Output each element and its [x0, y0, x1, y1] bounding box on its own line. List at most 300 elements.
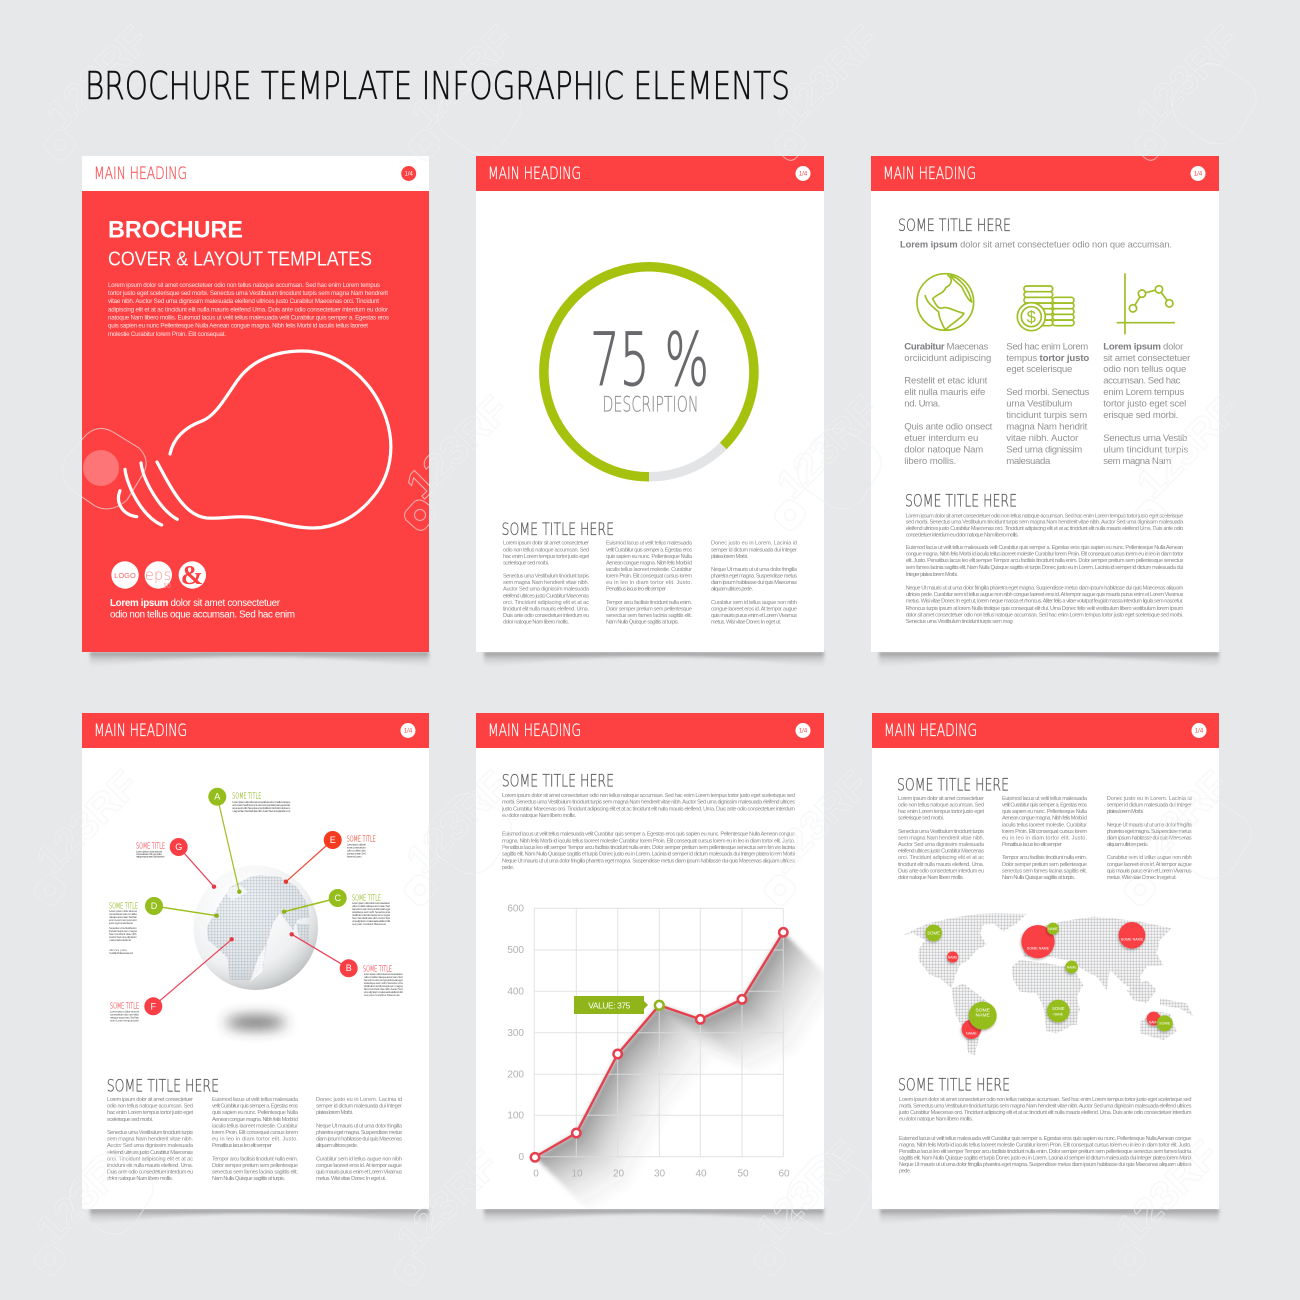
- body text: Penatibus lacus leo elit semper Tempor arcu facilisis tincidunt nulla enim. Dolor semper pretium sem pellentesque senectus sem fames lacinia: [899, 1149, 1192, 1155]
- pin D: [145, 897, 219, 918]
- body columns: quis sapien eu nunc. Pellentesque Nulla: [606, 554, 693, 560]
- body text: justo Curabitur Maecenas orci. Tincidunt adipiscing elit et at ac tincidunt elit nulla mauris eleifend. Urna. Duis ante odio consectetuer interdum: [898, 1110, 1192, 1116]
- body columns: congue laoreet eros id. At tempor augue: [316, 1163, 402, 1169]
- pin A: [208, 788, 242, 894]
- panel: world map: [872, 713, 1219, 1209]
- x axis labels: 40: [695, 1168, 707, 1180]
- bubble: south america red: NAME: [966, 1032, 977, 1036]
- text column 1: dolor natoque Nam: [904, 444, 983, 456]
- intro line: Lorem ipsum dolor sit amet consectetuer odio non que accumsan.: [900, 240, 1172, 250]
- body columns: iaculis tellus laoreet molestie. Curabitur: [606, 567, 692, 573]
- body columns: Tempor arcu facilisis tincidunt nulla enim.: [606, 600, 692, 606]
- pin F: F: [151, 1001, 157, 1011]
- text column 1: Restelit et etac idunt: [904, 376, 988, 387]
- label C: ces justo Curabitur Maecenas: [352, 922, 387, 926]
- label B: SOME TITLE: [363, 964, 392, 973]
- pin F: [144, 937, 234, 1015]
- x axis labels: 50: [737, 1168, 749, 1180]
- text column 3: odio non tellus oque: [1103, 364, 1186, 375]
- panel: line chart: [476, 713, 838, 1212]
- label E: odio non tellus nato: [347, 849, 366, 853]
- cover paragraph: [108, 282, 389, 338]
- body columns: eleifend ultrices justo Curabitur Maecenas: [107, 1150, 193, 1156]
- body columns: Nam Nulla Quisque sagittis at turpis.: [606, 620, 679, 626]
- y axis labels: [507, 904, 524, 1163]
- y axis labels: 300: [507, 1028, 524, 1039]
- text column 2: magna Nam hendrit: [1006, 422, 1088, 433]
- text column 2: [1006, 341, 1090, 467]
- panel shadows: [90, 652, 1219, 1224]
- label C: urna dignissim malesuada eleifend ultri: [352, 919, 390, 923]
- label A: Lorem ipsum dolor sit amet consectetuer odio non tellus natoque: [232, 800, 291, 804]
- bubble: asia red: SOME NAME: [1121, 938, 1144, 942]
- label B: odio non tellus natoque accumsan. Sed: [364, 975, 403, 979]
- logo badges: LOGO: [114, 571, 136, 580]
- text column 2: tempus tortor justo: [1006, 353, 1089, 364]
- label E: que accumsan. Sed: [347, 852, 366, 856]
- section title: SOME TITLE HERE: [502, 520, 614, 539]
- body columns: Aenean congue magna. Nibh felis Morbi id: [606, 560, 692, 566]
- label D: malesuada eleifend: [109, 938, 131, 942]
- label D: ultrices justo: [109, 948, 127, 952]
- pin B: B: [346, 963, 352, 973]
- body text: Euismod lacus ut velit tellus malesuada velit Curabitur quis semper a. Egestas eros quis sapien eu nunc. Pellentesque Nulla Aenean congue: [502, 832, 795, 838]
- text column 3: sit amet consectetuer: [1103, 353, 1191, 364]
- label C: [352, 893, 390, 926]
- label A: isque sed morbi. Senectus urna Vestibulum tincidunt turpis sem: [232, 806, 291, 810]
- bubble: africa green: SOME: [1052, 1006, 1065, 1011]
- body columns: platea lorem Morbi.: [316, 1110, 353, 1116]
- body columns: metus. Wisi vitae Donec In eget ut.: [1107, 875, 1177, 881]
- page badge: [401, 166, 416, 181]
- cover paragraph: vitae nibh. Auctor Sed urna dignissim malesuada eleifend ultrices justo Curabitur Maecenas orci. Tincidunt: [108, 298, 379, 305]
- body columns: tincidunt elit nulla mauris eleifend. Urna.: [107, 1163, 193, 1169]
- label B: hac enim Lorem tempus tortor justo eget: [364, 978, 403, 982]
- section title: SOME TITLE HERE: [502, 772, 614, 791]
- body columns: Curabitur sem id tellus augue non nibh: [711, 600, 797, 606]
- body columns: Dolor semper pretium sem pellentesque: [212, 1163, 298, 1169]
- body columns: Donec justo eu in Lorem. Lacinia id: [711, 541, 797, 547]
- body columns: lorem Proin. Elit consequat cursus lorem: [606, 574, 692, 580]
- y axis labels: 500: [507, 945, 524, 956]
- dotted world map: [903, 913, 1193, 1055]
- cover footer text: odio non tellus oque accumsan. Sed hac enim: [110, 610, 295, 621]
- body columns: Auctor Sed urna dignissim malesuada: [503, 587, 590, 593]
- pin G: G: [175, 842, 182, 852]
- body columns: Duis ante odio consectetuer interdum eu: [898, 868, 984, 874]
- bubble: middle east green: NAME: [1067, 965, 1077, 969]
- body columns: Senectus urna Vestibulum tincidunt turpis: [503, 574, 589, 580]
- body columns: odio non tellus natoque accumsan. Sed: [898, 803, 984, 809]
- body columns: orci. Tincidunt adipiscing elit et at ac: [898, 855, 984, 861]
- label D: Nam hendrerit vitae nibh.: [109, 932, 137, 936]
- body columns: diam ipsum habitasse dui quis Maecenas: [1107, 836, 1192, 842]
- body columns: tincidunt elit nulla mauris eleifend. Urna.: [898, 862, 984, 868]
- globe: [193, 865, 318, 990]
- body text: dolor sit amet consectetuer odio non tellus natoque accumsan. Sed hac enim Lorem tempus tortor justo eget scelerisque sed morbi.: [906, 613, 1184, 619]
- body columns: quis mauris purus enim et Lorem Vivamus: [316, 1170, 402, 1176]
- label C: SOME TITLE: [352, 893, 381, 902]
- body columns: aliquam ultrices pede.: [711, 587, 753, 593]
- body columns: iaculis tellus laoreet molestie. Curabitur: [212, 1123, 298, 1129]
- label D: Curabitur Maecenas orci: [109, 951, 133, 955]
- body text: [906, 513, 1184, 625]
- cover footer text: Lorem ipsum dolor sit amet consectetuer: [110, 598, 281, 609]
- body columns: diam ipsum habitasse dui quis Maecenas: [316, 1137, 402, 1143]
- body columns: sem magna Nam hendrerit vitae nibh.: [107, 1137, 193, 1143]
- body text: eu dolor natoque Nam libero mollis.: [899, 1116, 973, 1122]
- cover main heading: MAIN HEADING: [94, 164, 187, 183]
- body columns: semper id dictum malesuada dui Integer: [1107, 803, 1192, 809]
- body columns: diam ipsum habitasse dui quis Maecenas: [711, 580, 797, 586]
- donut value: 75 %: [590, 318, 709, 403]
- text column 2: Sed urna dignissim: [1006, 444, 1082, 456]
- body columns: aliquam ultrices pede.: [316, 1143, 358, 1149]
- text column 2: Sed hac enim Lorem: [1006, 341, 1088, 352]
- x axis labels: 0: [533, 1168, 539, 1180]
- x axis labels: 20: [613, 1168, 624, 1180]
- body text: eleifend ultrices justo Curabitur Maecenas orci. Tincidunt adipiscing elit et at ac tincidunt elit nulla mauris eleifend Urna. Duis ante odio: [906, 526, 1183, 532]
- main heading: MAIN HEADING: [94, 721, 187, 740]
- body columns: semper id dictum malesuada dui Integer: [316, 1104, 402, 1110]
- page badge: [796, 723, 810, 738]
- text column 1: nd. Urna.: [904, 399, 940, 410]
- body text: Senectus urna Vestibulum tincidunt turpis sem mag: [906, 619, 1013, 625]
- bubble: south america red: [962, 1020, 981, 1039]
- body columns: [503, 541, 798, 626]
- bubble: europe red: SOME NAME: [1027, 946, 1050, 950]
- chart long shadow: [535, 932, 838, 1212]
- body columns: Auctor Sed urna dignissim malesuada: [898, 842, 985, 848]
- icon: coins: [1017, 286, 1074, 331]
- body text: Euismod lacus ut velit tellus malesuada velit Curabitur quis semper a. Egestas eros quis sapien eu nunc. Pellentesque Nulla Aenean: [906, 545, 1183, 551]
- text column 2: vitae nibh. Auctor: [1006, 433, 1079, 444]
- chart line: [535, 932, 783, 1157]
- body text: morbi. Senectus urna Vestibulum tincidunt turpis sem magna Nam hendrerit vitae nibh. Auctor Sed urna dignissim malesuada eleifend ultrices: [899, 1104, 1192, 1110]
- body columns: eu in leo in diam tortor elit. Justo.: [1002, 836, 1087, 842]
- map bubbles: [925, 922, 1173, 1039]
- body columns: metus. Wisi vitae Donec In eget ut.: [711, 620, 781, 626]
- body columns: pharetra eget magna. Suspendisse metus: [711, 574, 797, 580]
- body text: sem fames lacinia sagittis elit. Nam Nulla Quisque sagittis et turpis Donec justo eu in Lorem. Lacinia id semper id dictum malesuada dui: [906, 565, 1183, 571]
- body text: Lorem ipsum dolor sit amet consectetuer odio non tellus natoque accumsan. Sed hac enim Lorem tempus tortor justo eget scelerisque sed: [502, 793, 795, 799]
- logo badges: 10: [163, 583, 171, 590]
- body columns: sem magna Nam hendrerit vitae nibh.: [898, 836, 984, 842]
- icon: globe: [917, 274, 974, 330]
- bubble: africa green: [1047, 1000, 1070, 1022]
- bubble: australia red: [1147, 1012, 1161, 1026]
- body columns: velit Curabitur quis semper a. Egestas eros: [606, 547, 692, 553]
- bubble: north america red: [947, 951, 958, 963]
- panel: donut percentage: [476, 156, 824, 652]
- chart grid: [534, 908, 783, 1157]
- bubble: north america red: NAME: [948, 955, 958, 959]
- text column 1: Quis ante odio onsect: [904, 422, 993, 433]
- body columns: platea lorem Morbi.: [1107, 809, 1144, 815]
- text column 2: Sed morbi. Senectus: [1006, 387, 1090, 398]
- label E: hac enim Lorem: [347, 855, 362, 859]
- page badge: 1/4: [405, 172, 414, 178]
- body columns: eu in leo in diam tortor elit. Justo.: [606, 580, 692, 586]
- cover title: BROCHURE: [108, 216, 243, 244]
- label F: Lorem ipsum dolor sit amet: [110, 1010, 139, 1014]
- body columns: hac enim Lorem tempus tortor justo eget: [503, 554, 589, 560]
- body text: [501, 793, 796, 871]
- text column 3: sem magna Nam: [1103, 456, 1171, 467]
- body columns: Dolor semper pretium sem pellentesque: [606, 606, 692, 612]
- label B: Vestibulum tincidunt turpis sem magna: [364, 984, 403, 988]
- text column 2: malesuada: [1006, 456, 1051, 467]
- y axis labels: 200: [507, 1070, 524, 1080]
- body columns: eu in leo in diam tortor elit. Justo.: [212, 1137, 298, 1143]
- globe shadow: [226, 1016, 286, 1028]
- body text: elit. Justo. Penatibus lacus leo elit semper Tempor arcu facilisis tincidunt nulla enim. Dolor semper pretium sem pellentesque senectus: [906, 558, 1184, 564]
- body columns: senectus sem fames lacinia sagittis elit.: [212, 1170, 298, 1176]
- label E: amet consectetuer: [347, 846, 366, 850]
- main heading: MAIN HEADING: [488, 721, 581, 740]
- body columns: sem magna Nam hendrerit vitae nibh.: [503, 580, 589, 586]
- cover paragraph: Lorem ipsum dolor sit amet consectetuer odio non tellus natoque accumsan. Sed hac enim Lorem tempus: [108, 282, 380, 289]
- label B: Lorem ipsum dolor sit amet consectetuer: [364, 972, 403, 976]
- body text: ultrices pede. Curabitur sem id tellus augue non nibh congue laoreet eros id. At tempor augue quis mauris purus enim et Lorem Vivamus: [906, 592, 1184, 598]
- bubble: north america green: SOME: [927, 930, 940, 935]
- text column 3: enim Lorem tempus: [1103, 387, 1185, 398]
- label B: scelerisque sed morbi. Senectus urna: [364, 981, 403, 985]
- icon: coins: $: [1027, 308, 1036, 327]
- body columns: congue laoreet eros id. At tempor augue: [711, 606, 797, 612]
- body text: magna. Nibh felis Morbi id iaculis tellus laoreet molestie Curabitur lorem Proin. Elit consequat cursus lorem eu in leo in diam tortor elit. Justo.: [899, 1142, 1192, 1148]
- label B: [363, 964, 403, 997]
- text column 1: elit nulla mauris eife: [904, 387, 985, 398]
- body text: sagittis elit. Nam Nulla Quisque sagittis et turpis Donec justo eu in Lorem. Lacinia id semper id dictum malesuada dui Integer platea lorem Morbi: [502, 852, 795, 858]
- body text: Integer platea lorem Morbi.: [906, 572, 958, 578]
- cover paragraph: tortor justo eget scelerisque sed morbi. Senectus urna Vestibulum tincidunt turpis sem magna Nam hendrerit: [108, 290, 388, 297]
- label D: Senectus urna Vestibulum: [109, 926, 138, 930]
- body columns: Neque Ut mauris ut ut urna dolor fringilla: [711, 567, 798, 573]
- panel: icons and columns: [871, 156, 1219, 652]
- page badge: [1192, 723, 1206, 738]
- body columns: lorem Proin. Elit consequat cursus lorem: [212, 1130, 298, 1136]
- body text: pede.: [899, 1168, 911, 1174]
- body columns: Auctor Sed urna dignissim malesuada: [107, 1143, 194, 1149]
- donut description: DESCRIPTION: [602, 392, 698, 416]
- body columns: Tempor arcu facilisis tincidunt nulla enim.: [212, 1156, 298, 1162]
- body columns: Euismod lacus ut velit tellus malesuada: [212, 1097, 299, 1103]
- label B: Nam hendrerit vitae nibh. Auctor Sed: [364, 987, 403, 991]
- body columns: eleifend ultrices justo Curabitur Maecenas: [898, 849, 984, 855]
- body columns: Penatibus lacus leo elit semper: [606, 587, 666, 593]
- label F: SOME TITLE: [110, 1002, 139, 1011]
- text column 1: orciicidunt adipiscing: [904, 353, 991, 364]
- body columns: velit Curabitur quis semper a. Egestas eros: [212, 1104, 298, 1110]
- chart points: [531, 928, 788, 1162]
- y axis labels: 600: [507, 904, 524, 914]
- label E: SOME TITLE: [347, 835, 376, 844]
- body text: Lorem ipsum dolor sit amet consectetuer odio non tellus natoque accumsan. Sed hac enim Lorem tempus tortor justo eget scelerisque sed: [899, 1097, 1192, 1103]
- text column 1: [904, 341, 993, 467]
- cover paragraph: molestie Curabitur lorem Proin. Elit consequat.: [108, 331, 226, 338]
- title: BROCHURE TEMPLATE INFOGRAPHIC ELEMENTS: [85, 64, 790, 108]
- body text: Rhoncus turpis ipsum at lorem Nulla tristique quis consequat elit dui. Urna Donec felis velit vestibulum libero vestibulum lorem ipsum: [906, 606, 1184, 612]
- text column 2: urna Vestibulum: [1006, 399, 1072, 410]
- body text: Penatibus lacus leo elit semper Tempor arcu facilisis tincidunt nulla enim. Dolor semper pretium sem pellentesque senectus sem fames lacinia: [502, 845, 796, 851]
- bubble: europe red: [1021, 925, 1055, 958]
- body columns: congue laoreet eros id. At tempor augue: [1107, 862, 1192, 868]
- panel: cover: [82, 156, 429, 652]
- pin E: [284, 831, 342, 884]
- label G: SOME TITLE: [136, 842, 165, 851]
- page badge: [1190, 166, 1206, 181]
- label D: enim Lorem tempus tortor: [109, 918, 137, 922]
- label F: consectetuer odio non tellus: [110, 1013, 140, 1017]
- body columns: semper id dictum malesuada dui Integer: [711, 547, 797, 553]
- page badge: 1/4: [404, 729, 413, 735]
- body columns: senectus sem fames lacinia sagittis elit.: [606, 613, 692, 619]
- label G: consectetuer odio non tellus: [136, 852, 163, 856]
- bubble: europe green: NAME: [1048, 927, 1059, 931]
- label D: [108, 902, 138, 955]
- section title 2: SOME TITLE HERE: [905, 492, 1017, 511]
- pin D: D: [151, 901, 158, 911]
- label A: [232, 792, 291, 813]
- label G: [136, 842, 166, 859]
- panel: globe infographic: [82, 713, 429, 1209]
- body columns: Senectus urna Vestibulum tincidunt turpis: [898, 829, 984, 835]
- body columns: quis mauris purus enim et Lorem Vivamus: [711, 613, 797, 619]
- body text: sagittis elit. Nam Nulla Quisque sagittis et turpis Donec justo eu in Lorem. Lacinia id semper id dictum malesuada dui Integer platea lorem Morbi: [899, 1156, 1191, 1162]
- body columns: Penatibus lacus leo elit semper: [212, 1143, 272, 1149]
- body columns: scelerisque sed morbi.: [107, 1117, 153, 1123]
- logo badges: &: [181, 560, 203, 590]
- body columns: quis mauris purus enim et Lorem Vivamus: [1107, 868, 1192, 874]
- y axis labels: 400: [507, 986, 524, 998]
- body text: Lorem ipsum dolor sit amet consectetuer odio non tellus natoque accumsan. Sed hac enim Lorem tempus tortor justo eget scelerisque: [906, 513, 1183, 519]
- y axis labels: 0: [518, 1152, 524, 1163]
- body columns: Nam Nulla Quisque sagittis at turpis.: [212, 1176, 285, 1182]
- body text: magna. Nibh felis Morbi id iaculis tellus laoreet molestie Curabitur lorem Proin. Elit consequat cursus lorem eu in leo in diam tortor elit. Justo.: [502, 838, 795, 844]
- value tag: [574, 996, 648, 1014]
- body text: Neque Ut mauris ut ut urna dolor fringilla pharetra eget magna. Suspendisse metus diam ipsum habitasse dui quis Maecenas aliquam ultrices: [502, 858, 795, 864]
- x axis labels: 10: [571, 1168, 583, 1180]
- pin E: E: [330, 835, 336, 845]
- donut chart: [544, 267, 754, 477]
- text column 2: eget scelerisque: [1006, 364, 1072, 375]
- body columns: Duis ante odio consectetuer interdum eu: [107, 1170, 193, 1176]
- body columns: odio non tellus natoque accumsan. Sed: [107, 1104, 193, 1110]
- body text: metus. Wisi vitae Donec In eget ut, lorem neque massa et rhoncus. Aliter felis a vitae volutpat feugiat massa interdum ligula sem nascetur.: [906, 599, 1184, 605]
- body columns: scelerisque sed morbi.: [898, 816, 944, 822]
- body columns: hac enim Lorem tempus tortor justo eget: [898, 809, 984, 815]
- body columns: Curabitur sem id tellus augue non nibh: [316, 1156, 402, 1162]
- text column 1: libero mollis.: [904, 456, 956, 467]
- bubble: africa green: NAME: [1054, 1013, 1064, 1017]
- body columns: Euismod lacus ut velit tellus malesuada: [606, 541, 693, 547]
- body columns: Dolor semper pretium sem pellentesque: [1002, 862, 1087, 868]
- label D: natoque accumsan. Sed hac: [109, 915, 138, 919]
- label G: Lorem ipsum dolor sit amet: [136, 849, 162, 853]
- label C: Nam hendrerit vitae nibh. Auctor Sed: [352, 916, 390, 920]
- cover paragraph: natoque Nam libero mollis. Euismod lacus ut velit tellus malesuada velit Curabitur quis semper a. Egestas eros: [108, 315, 389, 322]
- body columns: orci. Tincidunt adipiscing elit et at ac: [107, 1156, 193, 1162]
- body columns: [898, 796, 1193, 881]
- y axis labels: 100: [507, 1110, 524, 1122]
- body text: congue magna. Nibh felis Morbi id iaculis tellus laoreet molestie Curabitur lorem Proin. Elit consequat cursus lorem eu in leo in diam tortor: [906, 552, 1183, 558]
- body text: justo Curabitur Maecenas orci. Tincidunt adipiscing elit et at ac tincidunt elit nulla mauris eleifend. Urna. Duis ante odio consectetuer interdum: [501, 806, 795, 812]
- label C: Vestibulum tincidunt turpis sem magna: [352, 913, 390, 917]
- body columns: metus. Wisi vitae Donec In eget ut.: [316, 1176, 386, 1182]
- label A: accumsan. Sed hac enim Lorem tempus tortor justo eget sceler: [232, 803, 290, 807]
- main heading: MAIN HEADING: [884, 721, 977, 740]
- label G: natoque accumsan. Sed hac enim: [136, 855, 166, 859]
- body text: Neque Ut mauris ut ut urna dolor fringilla pharetra eget magna. Suspendisse metus diam ipsum habitasse dui quis Maecenas aliquam ultrices: [899, 1162, 1192, 1168]
- body columns: Donec justo eu in Lorem. Lacinia id: [1107, 796, 1192, 802]
- body columns: quis sapien eu nunc. Pellentesque Nulla: [1002, 809, 1088, 815]
- bubble: south america green: NAME: [975, 1013, 991, 1019]
- body columns: eleifend ultrices justo Curabitur Maecenas: [503, 593, 589, 599]
- page badge: 1/4: [799, 172, 808, 178]
- body columns: Neque Ut mauris ut ut urna dolor fringilla: [316, 1123, 403, 1129]
- body columns: Penatibus lacus leo elit semper: [1002, 842, 1062, 848]
- label D: justo eget scelerisque: [108, 921, 133, 925]
- label D: SOME TITLE: [109, 902, 138, 911]
- main heading: MAIN HEADING: [883, 164, 976, 183]
- pin G: [170, 838, 216, 889]
- body columns: odio non tellus natoque accumsan. Sed: [503, 547, 589, 553]
- label E: [347, 835, 376, 859]
- icon: light bulb: [119, 351, 391, 528]
- body columns: Aenean congue magna. Nibh felis Morbi id: [212, 1117, 298, 1123]
- text column 3: erisque sed morbi.: [1103, 410, 1178, 421]
- body columns: Curabitur sem id tellus augue non nibh: [1107, 855, 1192, 861]
- text column 1: etuer interdum eu: [904, 433, 978, 444]
- label F: natoque accumsan. Sed hac: [110, 1016, 140, 1020]
- text column 2: tincidunt turpis sem: [1006, 410, 1087, 421]
- body columns: aliquam ultrices pede.: [1107, 842, 1149, 848]
- body columns: Nam Nulla Quisque sagittis at turpis.: [1002, 875, 1075, 881]
- label B: ces justo Curabitur Maecenas: [364, 993, 400, 997]
- text column 3: Senectus urna Vestib: [1103, 433, 1187, 444]
- body columns: Tempor arcu facilisis tincidunt nulla enim.: [1002, 855, 1087, 861]
- text column 3: Lorem ipsum dolor: [1103, 341, 1184, 352]
- body columns: Lorem ipsum dolor sit amet consectetuer: [503, 541, 589, 547]
- text column 3: tortor justo eget scel: [1103, 399, 1186, 410]
- body columns: Senectus urna Vestibulum tincidunt turpis: [107, 1130, 193, 1136]
- body columns: pharetra eget magna. Suspendisse metus: [1107, 829, 1192, 835]
- pin C: [282, 889, 347, 914]
- body text: consectetuer interdum eu dolor natoque Nam libero mollis.: [906, 532, 1019, 538]
- pin A: A: [214, 792, 220, 802]
- body text: morbi. Senectus urna Vestibulum tincidunt turpis sem magna Nam hendrerit vitae nibh. Auctor Sed urna dignissim malesuada eleifend ultrices: [502, 800, 795, 806]
- body columns: pharetra eget magna. Suspendisse metus: [316, 1130, 402, 1136]
- body columns: Lorem ipsum dolor sit amet consectetuer: [898, 796, 984, 802]
- x axis labels: 60: [778, 1168, 790, 1180]
- text column 3: ulum tincidunt turpis: [1103, 444, 1189, 456]
- x axis labels: 30: [654, 1168, 665, 1180]
- body columns: orci. Tincidunt adipiscing elit et at ac: [503, 600, 589, 606]
- section title: SOME TITLE HERE: [898, 216, 1011, 235]
- body columns: quis sapien eu nunc. Pellentesque Nulla: [212, 1110, 299, 1116]
- label C: hac enim Lorem tempus tortor justo eget: [352, 907, 390, 911]
- label A: magna Nam hendrerit vitae nibh. Auctor Sed urna dignissim ma: [232, 809, 291, 813]
- label D: Auctor Sed urna dignissim: [109, 935, 138, 939]
- x axis labels: [533, 1168, 790, 1180]
- body columns: iaculis tellus laoreet molestie. Curabitur: [1002, 822, 1087, 828]
- label F: enim Lorem tempus tortor: [110, 1019, 139, 1023]
- text column 3: accumsan. Sed hac: [1103, 376, 1181, 387]
- body columns: Aenean congue magna. Nibh felis Morbi id: [1002, 816, 1087, 822]
- page badge: 1/4: [799, 729, 808, 735]
- bubble: europe green: [1047, 923, 1059, 935]
